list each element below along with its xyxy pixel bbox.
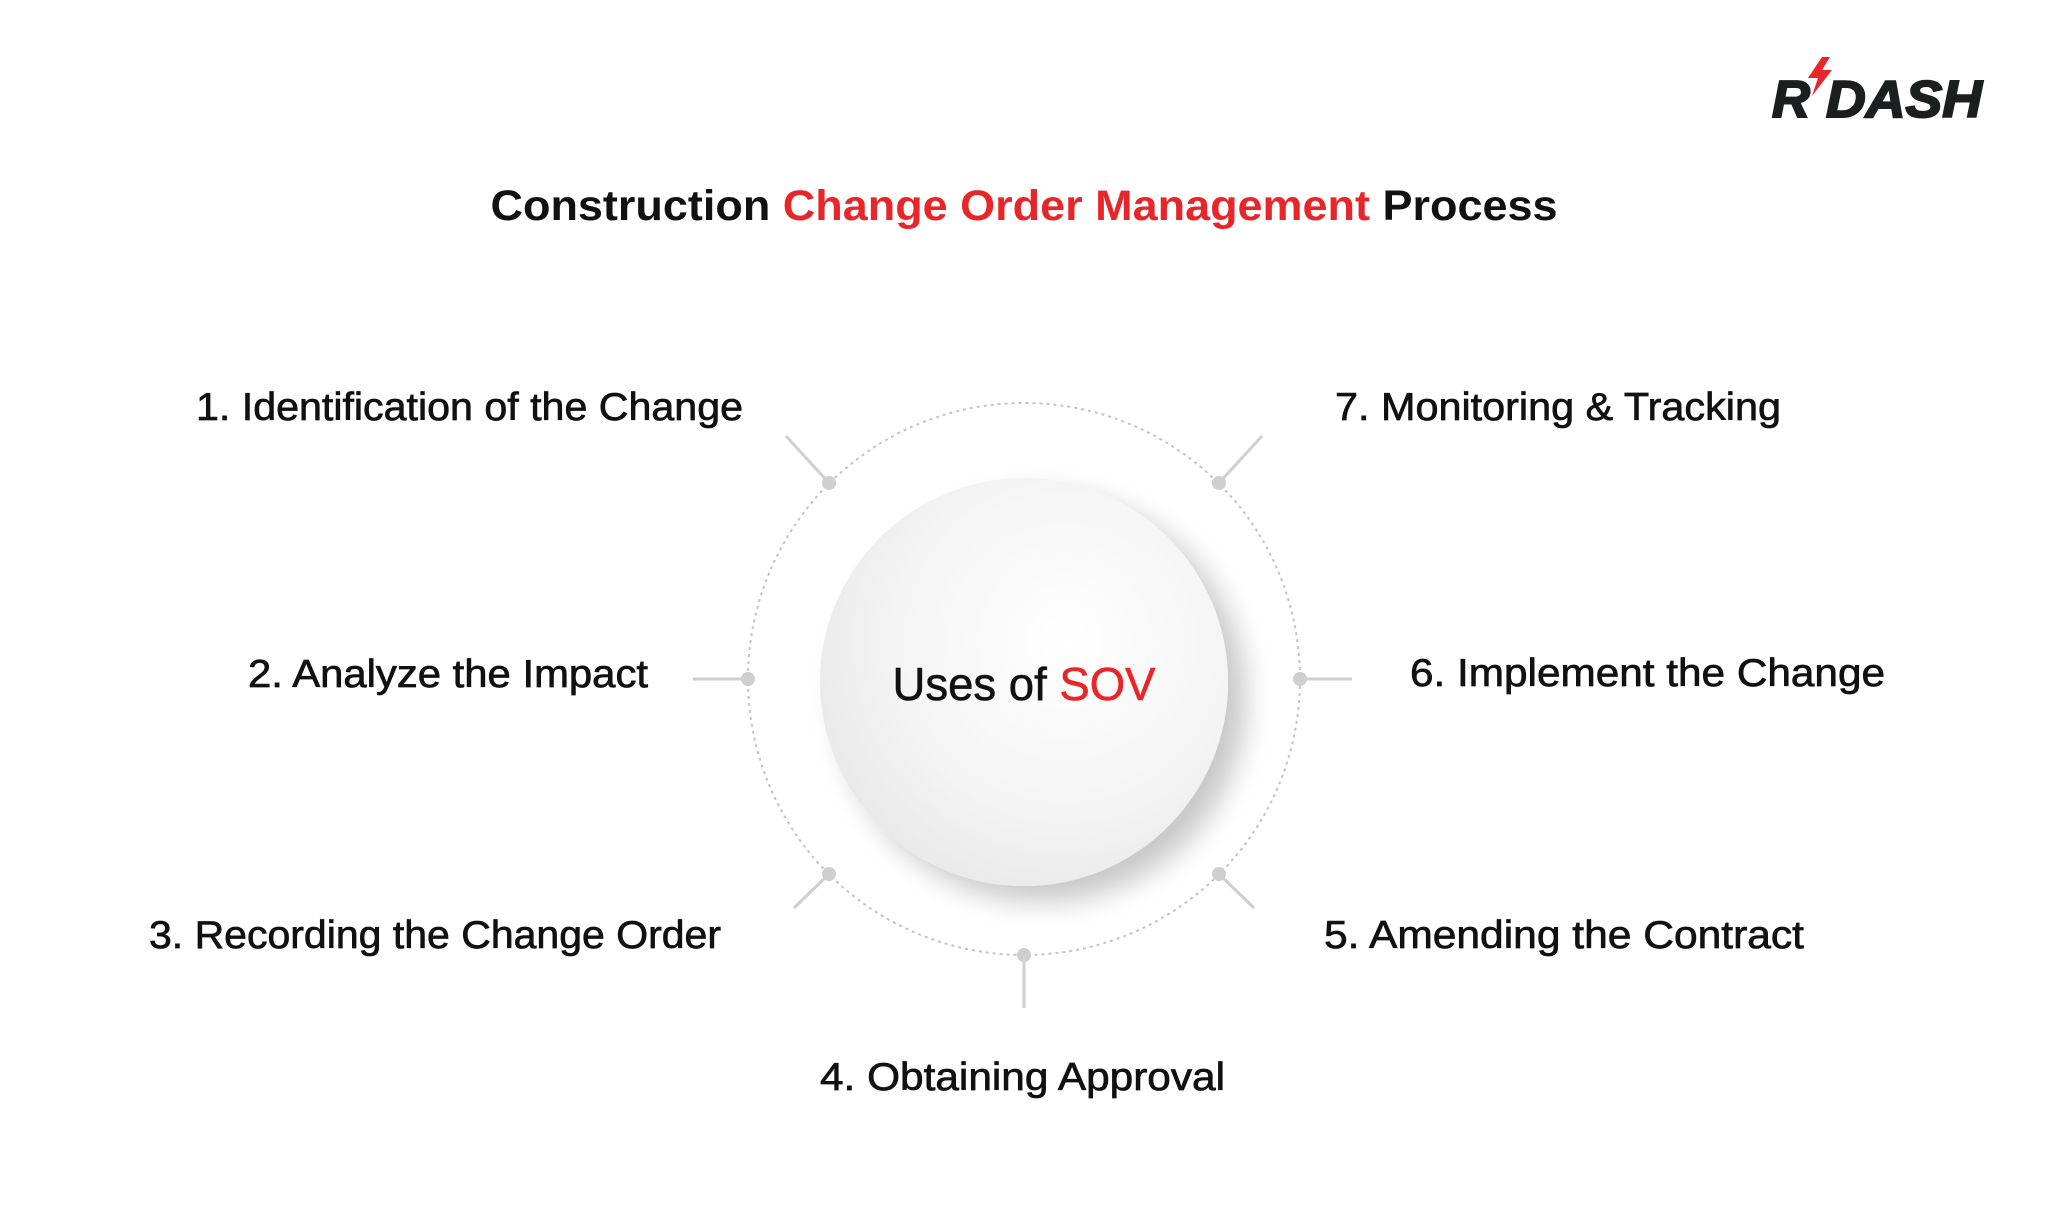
dotted ring — [748, 403, 1300, 955]
step 6: 6. Implement the Change — [1410, 652, 1885, 695]
connectors — [693, 436, 1352, 1008]
step 3: 3. Recording the Change Order — [149, 914, 721, 957]
logo: DASH — [1826, 71, 1984, 129]
step 2: 2. Analyze the Impact — [248, 653, 648, 696]
logo — [1772, 57, 1984, 129]
center text: Uses of SOV — [892, 658, 1156, 710]
labels — [149, 386, 1885, 1099]
step 4: 4. Obtaining Approval — [820, 1056, 1225, 1099]
title: Construction Change Order Management Process — [490, 182, 1558, 230]
step 5: 5. Amending the Contract — [1324, 914, 1804, 957]
step 7: 7. Monitoring & Tracking — [1335, 386, 1781, 429]
logo: R — [1772, 71, 1810, 129]
step 1: 1. Identification of the Change — [196, 386, 743, 429]
center circle — [820, 478, 1228, 886]
